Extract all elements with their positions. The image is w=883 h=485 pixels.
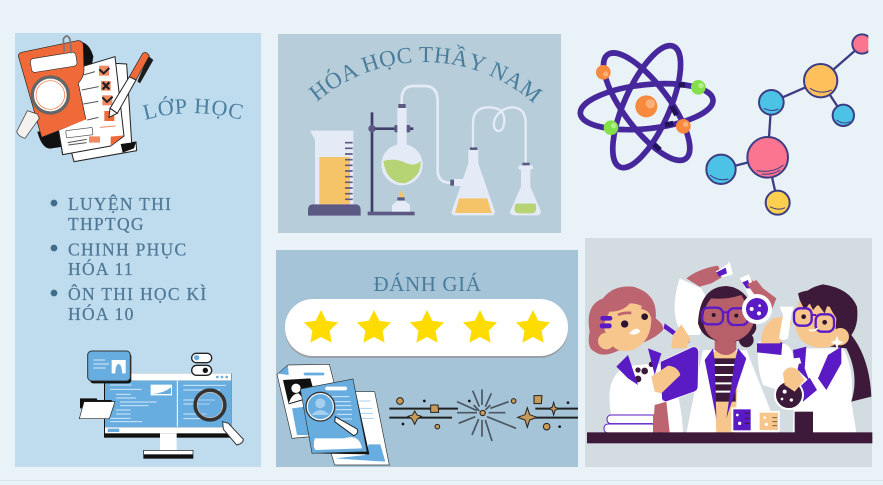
panel: rating: [276, 250, 578, 467]
heading: LỚP HỌC: LỚP HỌC: [142, 96, 243, 120]
bullet list: ÔN THI HỌC KÌ: [68, 284, 208, 304]
heading: ĐÁNH GIÁ: ĐÁNH GIÁ: [373, 272, 482, 296]
icon: computer with magnifier: [79, 351, 243, 459]
icon: atom: [578, 37, 715, 176]
illustration: three students in the lab: [587, 262, 872, 443]
icon: clipboard and checklist: [17, 36, 153, 162]
right student: [757, 284, 871, 433]
sample cards: [731, 407, 780, 432]
decoration: sparkles: [389, 389, 578, 441]
bullet list: [51, 194, 208, 324]
icon: molecule: [706, 25, 882, 215]
flask held by middle student: [740, 274, 772, 324]
bullet list: THPTQG: [68, 214, 145, 234]
illustration: lab glassware: [308, 86, 541, 216]
panel: chemistry lab: [278, 34, 561, 233]
icon: documents with magnifier: [277, 364, 389, 465]
panel: scientists: [585, 238, 872, 467]
bullet list: HÓA 10: [68, 304, 135, 324]
raised arm and middle student: [675, 262, 780, 433]
bullet list: HÓA 11: [68, 259, 134, 279]
lab bench: [587, 432, 872, 443]
left student: [589, 286, 683, 432]
heading: HÓA HỌC THẦY NAM: HÓA HỌC THẦY NAM: [308, 44, 543, 104]
bullet list: CHINH PHỤC: [68, 240, 187, 260]
clipboard and hand: [651, 323, 699, 402]
rating pill with five stars: [285, 299, 568, 358]
bullet list: LUYỆN THI: [68, 194, 172, 214]
books: [604, 414, 663, 433]
panel: classes: [15, 33, 261, 467]
